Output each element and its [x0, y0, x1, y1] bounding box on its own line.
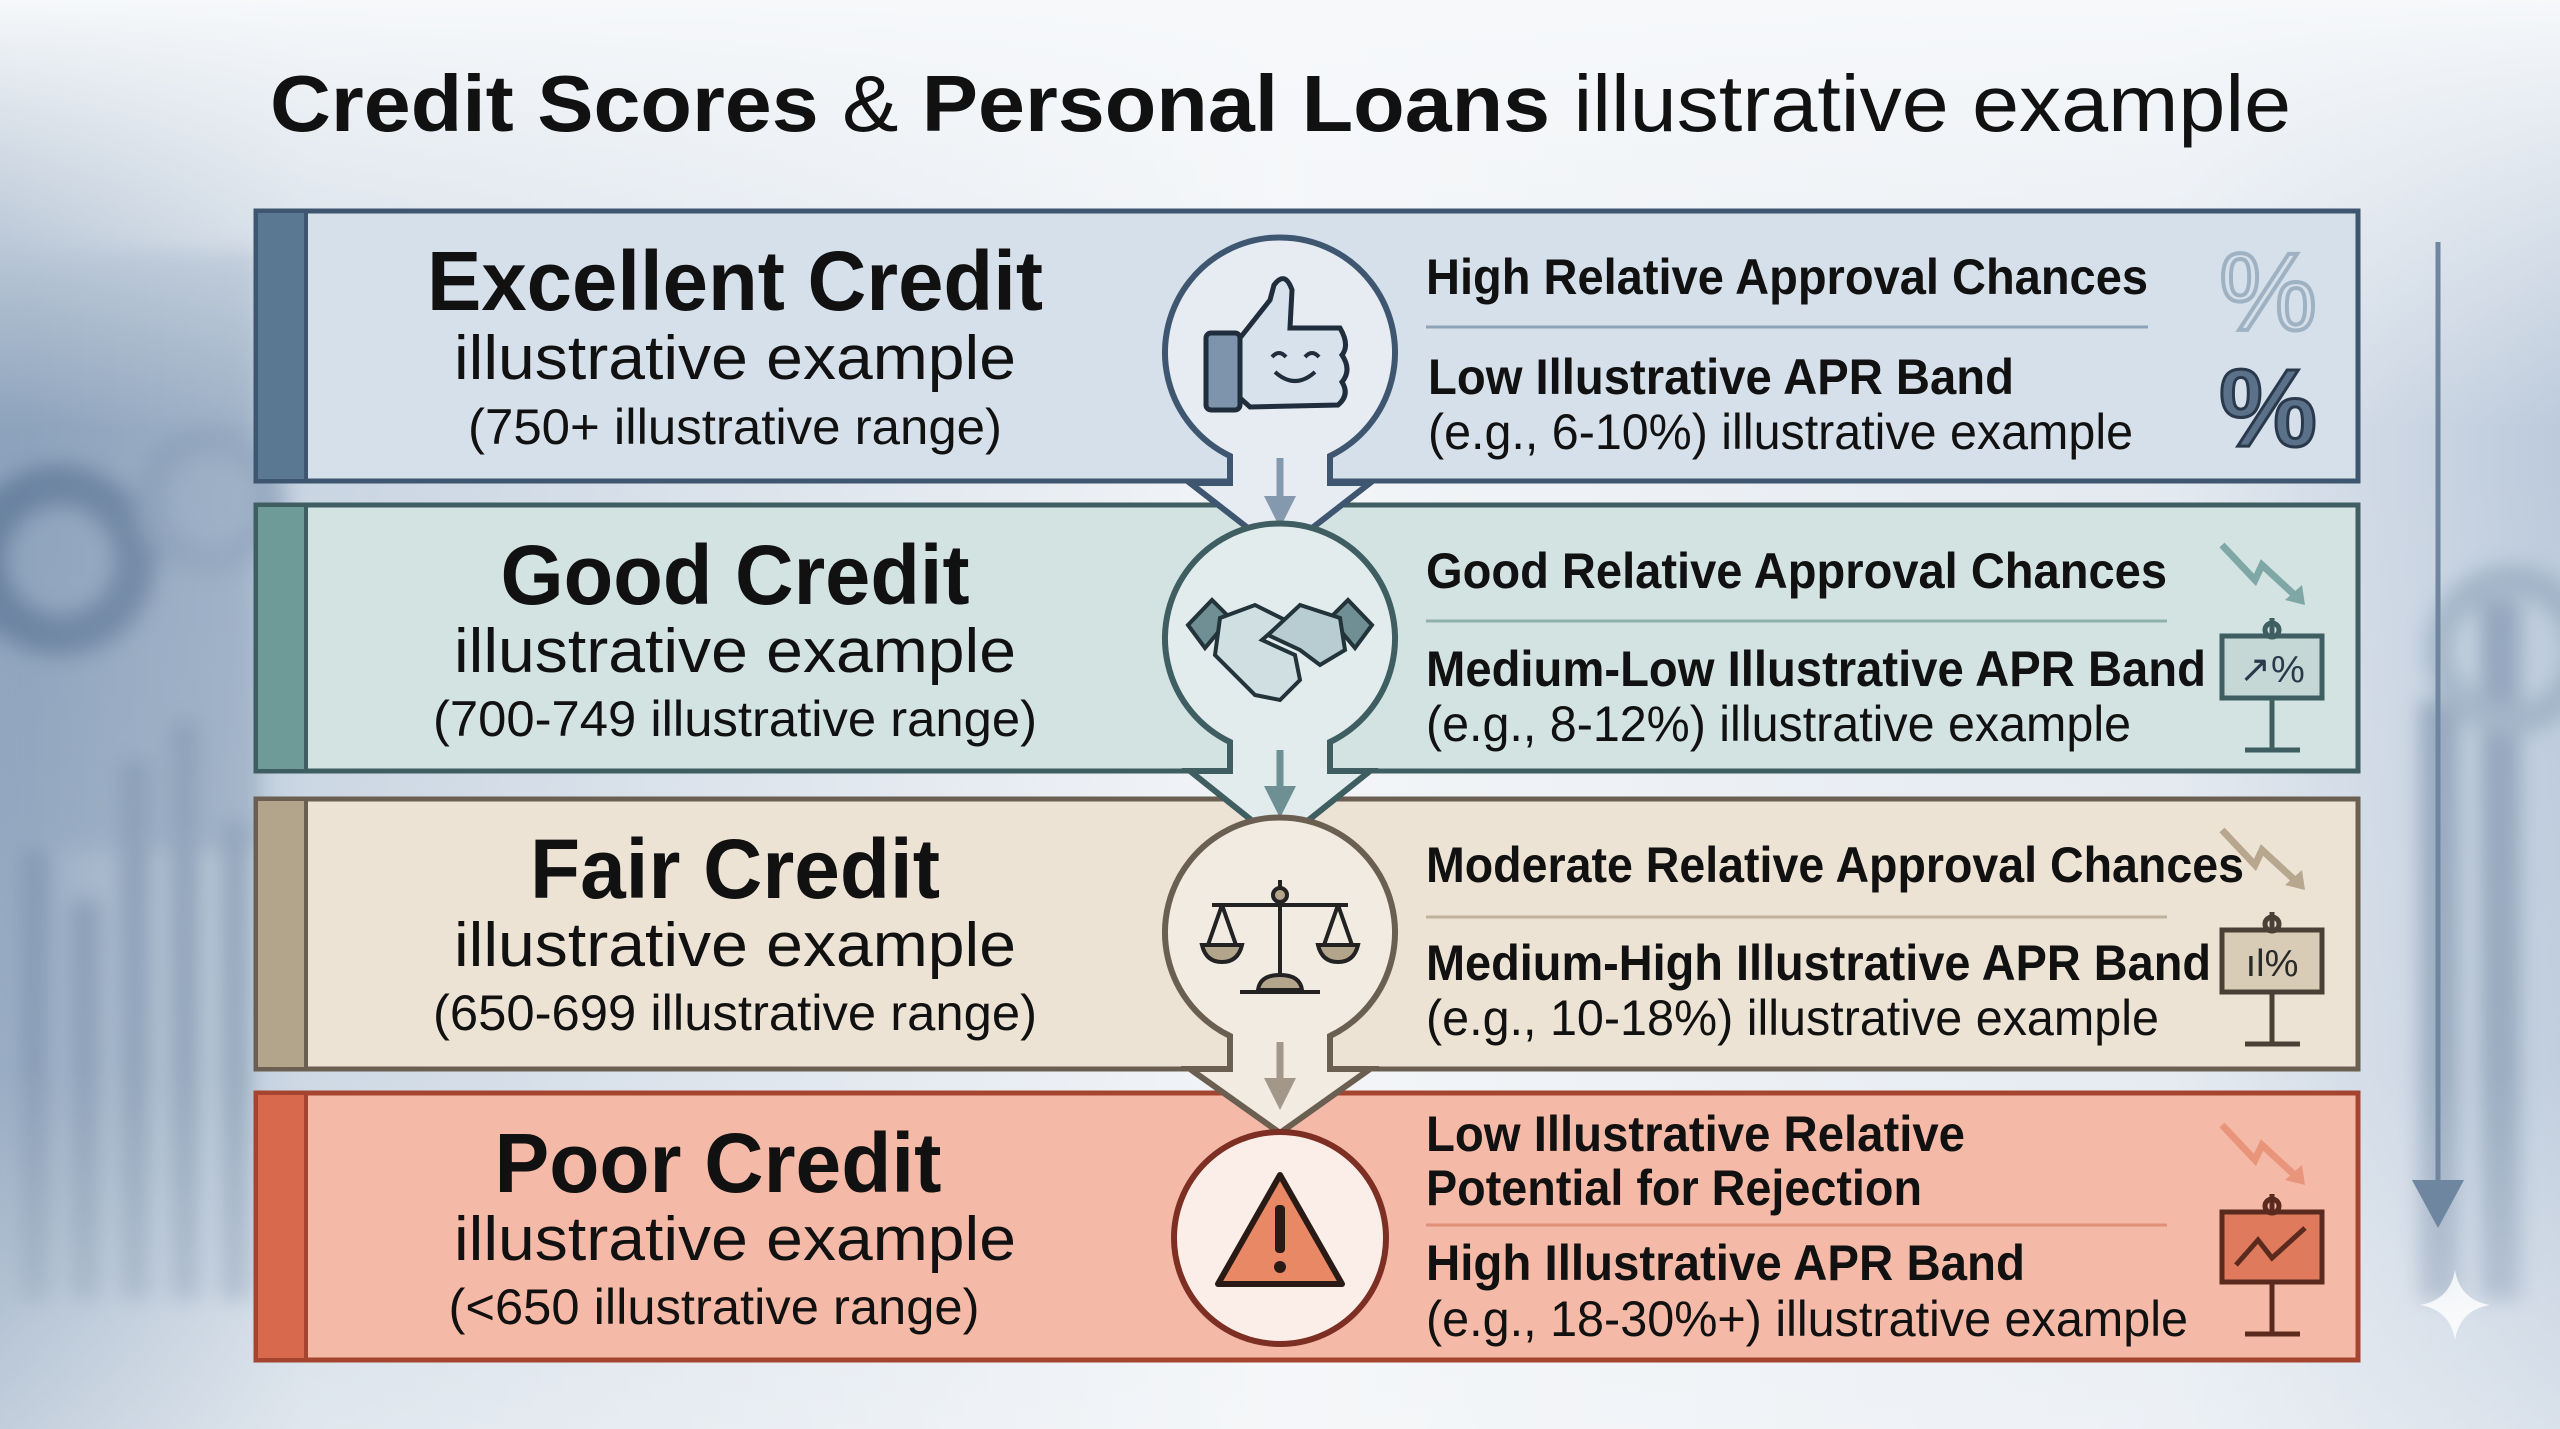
- text: good details: Good Relative Approval Chances: [1426, 543, 2167, 599]
- text: poor heading: (<650 illustrative range): [448, 1279, 980, 1335]
- text: good heading: [433, 528, 1037, 747]
- text: good details: [1426, 543, 2206, 752]
- text: poor heading: Poor Credit: [494, 1116, 942, 1210]
- text: fair heading: illustrative example: [454, 911, 1016, 980]
- text: fair details: Moderate Relative Approval Chances: [1426, 837, 2244, 893]
- text: poor details: Low Illustrative Relative: [1426, 1106, 1965, 1162]
- icon: down arrow and sign: ıl%: [2246, 943, 2298, 985]
- text: fair details: (e.g., 10-18%) illustrative example: [1426, 990, 2159, 1046]
- text: good heading: (700-749 illustrative range): [433, 691, 1037, 747]
- icon: percent signs: [2219, 231, 2317, 470]
- text: poor heading: [448, 1116, 1016, 1335]
- icon: down arrow and sign: ↗%: [2239, 649, 2305, 691]
- icon: warning circle: [1174, 1132, 1386, 1344]
- text: fair heading: (650-699 illustrative range): [433, 985, 1037, 1041]
- title: Credit Scores & Personal Loans illustrative example: [270, 59, 2291, 148]
- text: good details: Medium-Low Illustrative APR Band: [1426, 641, 2206, 697]
- text: fair details: [1426, 837, 2244, 1046]
- icon: down arrow and sign: [2222, 1125, 2322, 1334]
- icon: handshake pin: [1165, 523, 1395, 843]
- icon: down arrow and sign: [2222, 830, 2322, 1044]
- text: excellent heading: illustrative example: [454, 324, 1016, 393]
- text: excellent details: (e.g., 6-10%) illustrative example: [1428, 404, 2133, 460]
- band: poor credit: [256, 1093, 2358, 1360]
- text: good heading: Good Credit: [500, 528, 970, 622]
- text: poor heading: illustrative example: [454, 1205, 1016, 1274]
- icon: down arrow and sign: [2222, 545, 2322, 750]
- icon: percent signs: %: [2219, 231, 2317, 354]
- icon: sparkle: [2420, 1270, 2490, 1340]
- text: excellent details: [1426, 249, 2148, 460]
- band: excellent credit: [256, 211, 2358, 481]
- text: fair details: Medium-High Illustrative APR Band: [1426, 935, 2211, 991]
- text: excellent heading: [427, 234, 1043, 455]
- band: good credit: [256, 505, 2358, 771]
- text: excellent heading: (750+ illustrative range): [468, 399, 1002, 455]
- text: poor details: Potential for Rejection: [1426, 1160, 1922, 1216]
- text: poor details: [1426, 1106, 2188, 1347]
- arrow: vertical scale arrow: [2412, 242, 2464, 1228]
- text: excellent details: Low Illustrative APR Band: [1428, 349, 2014, 405]
- band: fair credit: [256, 799, 2358, 1069]
- icon: percent signs: %: [2219, 347, 2317, 470]
- icon: scales pin: [1165, 817, 1395, 1133]
- text: excellent heading: Excellent Credit: [427, 234, 1043, 328]
- text: fair heading: Fair Credit: [530, 822, 940, 916]
- text: poor details: High Illustrative APR Band: [1426, 1235, 2025, 1291]
- text: excellent details: High Relative Approval Chances: [1426, 249, 2148, 305]
- icon: thumbs up pin: [1165, 237, 1395, 553]
- text: good details: (e.g., 8-12%) illustrative example: [1426, 696, 2131, 752]
- text: poor details: (e.g., 18-30%+) illustrative example: [1426, 1291, 2188, 1347]
- text: fair heading: [433, 822, 1037, 1041]
- text: good heading: illustrative example: [454, 617, 1016, 686]
